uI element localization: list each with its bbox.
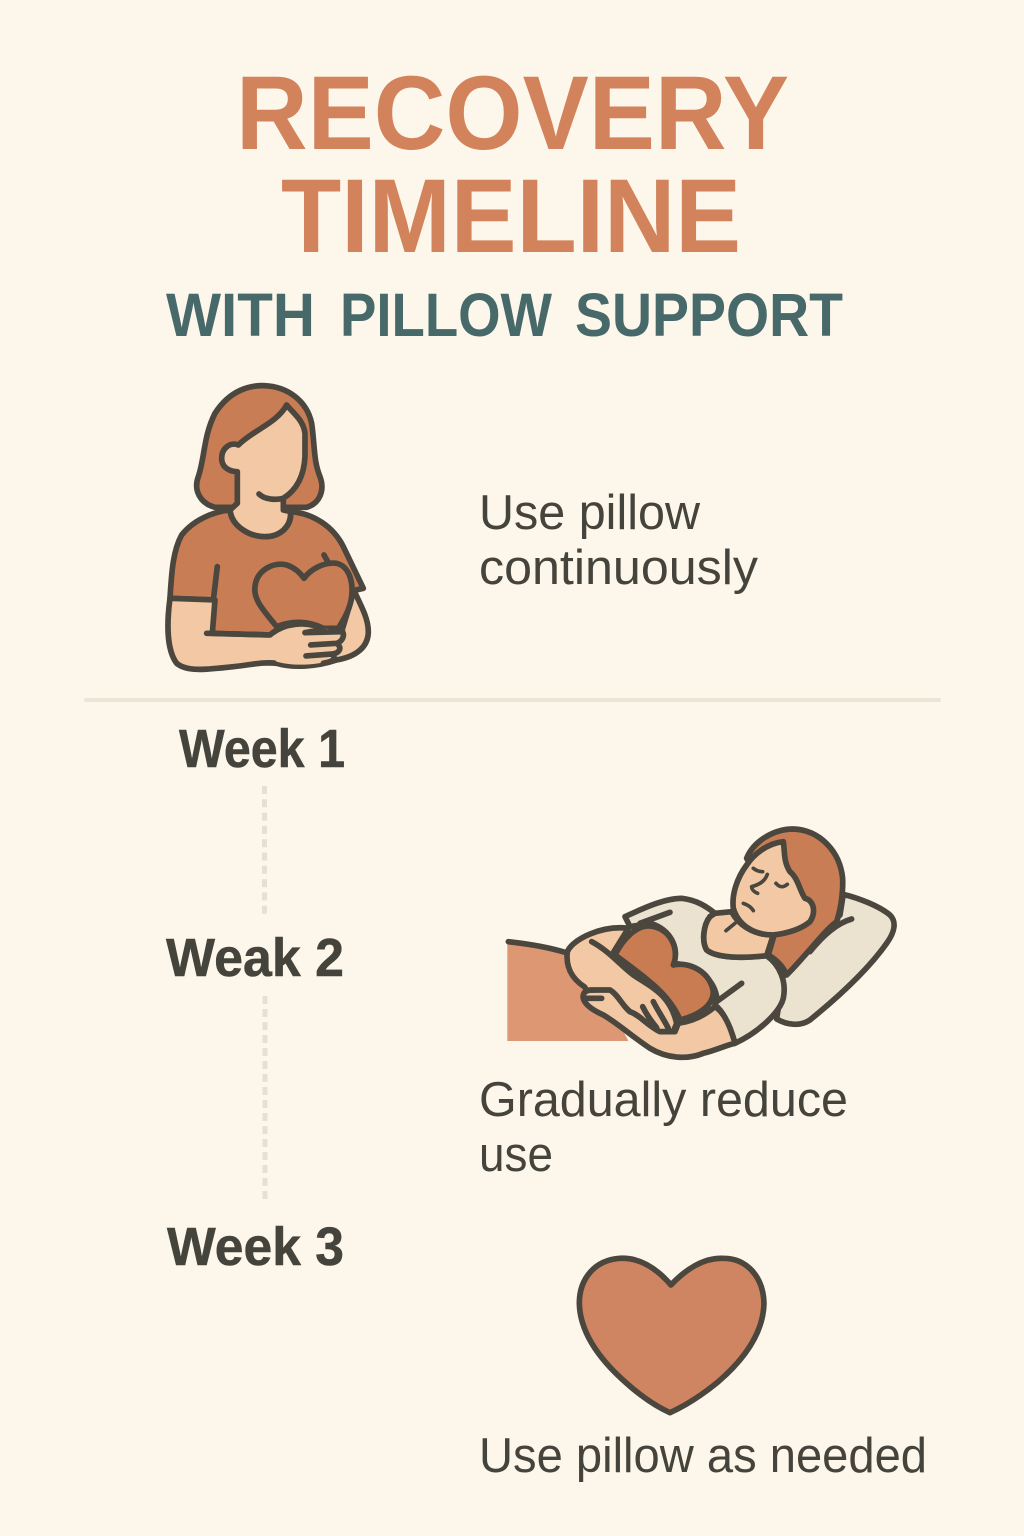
text: gradually reduce use <box>479 1073 848 1182</box>
title: TIMELINE <box>281 158 741 275</box>
text: use pillow as needed: Use pillow as needed <box>479 1429 927 1483</box>
text: gradually reduce use: Gradually reduce <box>479 1073 848 1127</box>
text: use pillow continuously <box>479 486 759 595</box>
text: gradually reduce use: use <box>479 1128 553 1182</box>
label: weak 2: Weak 2 <box>166 928 344 988</box>
title <box>236 55 789 275</box>
subtitle: PILLOW <box>340 281 552 349</box>
label: week 3: Week 3 <box>167 1217 344 1277</box>
subtitle <box>166 281 843 349</box>
subtitle: WITH <box>166 281 315 349</box>
text: use pillow continuously: Use pillow <box>479 486 701 540</box>
text: use pillow continuously: continuously <box>479 541 759 595</box>
icon: heart pillow <box>579 1258 764 1413</box>
subtitle: SUPPORT <box>575 281 843 349</box>
icon: woman lying down with heart pillow <box>507 829 894 1057</box>
label: week 1: Week 1 <box>179 719 345 779</box>
icon: woman hugging heart pillow <box>168 386 368 669</box>
title: RECOVERY <box>236 55 789 172</box>
